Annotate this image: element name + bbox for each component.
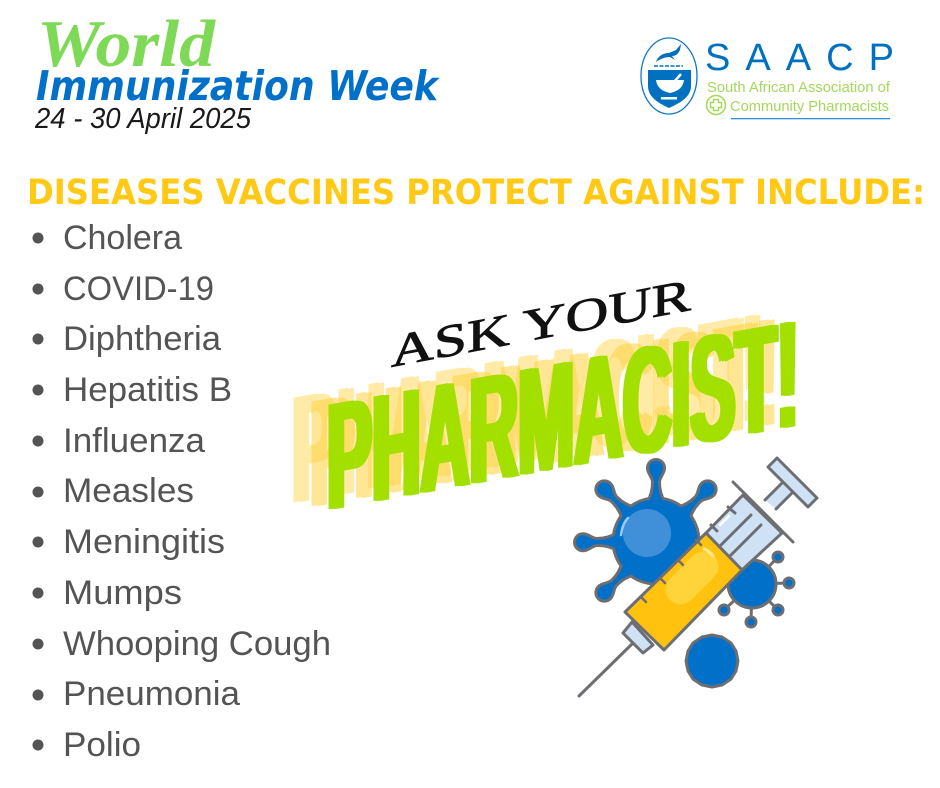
title: World Immunization Week <box>34 7 440 135</box>
disease list: Meningitis <box>63 523 225 561</box>
disease list: COVID-19 <box>63 270 214 308</box>
title words: Immunization Week: Immunization Week <box>36 62 440 110</box>
disease list: Diphtheria <box>63 320 221 358</box>
disease list <box>32 219 331 764</box>
disease list: Cholera <box>63 219 182 257</box>
date: 24 - 30 April 2025 <box>34 103 252 135</box>
slogan: Pharmacist <box>324 288 802 543</box>
slogan: Pharmacist shadow far <box>289 281 767 536</box>
icon: syringe <box>579 458 817 696</box>
icon: small virus <box>719 552 794 627</box>
title word: World: World <box>37 7 217 81</box>
icon: round virus <box>686 635 738 687</box>
disease list: Whooping Cough <box>63 625 331 663</box>
disease list: Measles <box>63 472 194 510</box>
logo subtitle line 1: South African Association of <box>707 79 891 96</box>
disease list: Polio <box>63 726 141 764</box>
icon: large virus <box>574 460 720 605</box>
icon: viruses and syringe <box>574 458 817 696</box>
slogan: Pharmacist shadow near <box>307 286 781 540</box>
disease list: Hepatitis B <box>63 371 232 409</box>
logo subtitle line 2: Community Pharmacists <box>730 98 889 115</box>
disease list: Influenza <box>63 422 205 460</box>
disease list: Mumps <box>63 574 182 612</box>
logo: SAACP <box>641 37 894 119</box>
slogan: Ask your: ASK YOUR <box>391 270 691 378</box>
logo wordmark: SAACP <box>705 37 894 79</box>
disease list: Pneumonia <box>63 675 240 713</box>
logo emblem <box>641 38 697 114</box>
logo plus icon <box>706 96 726 114</box>
